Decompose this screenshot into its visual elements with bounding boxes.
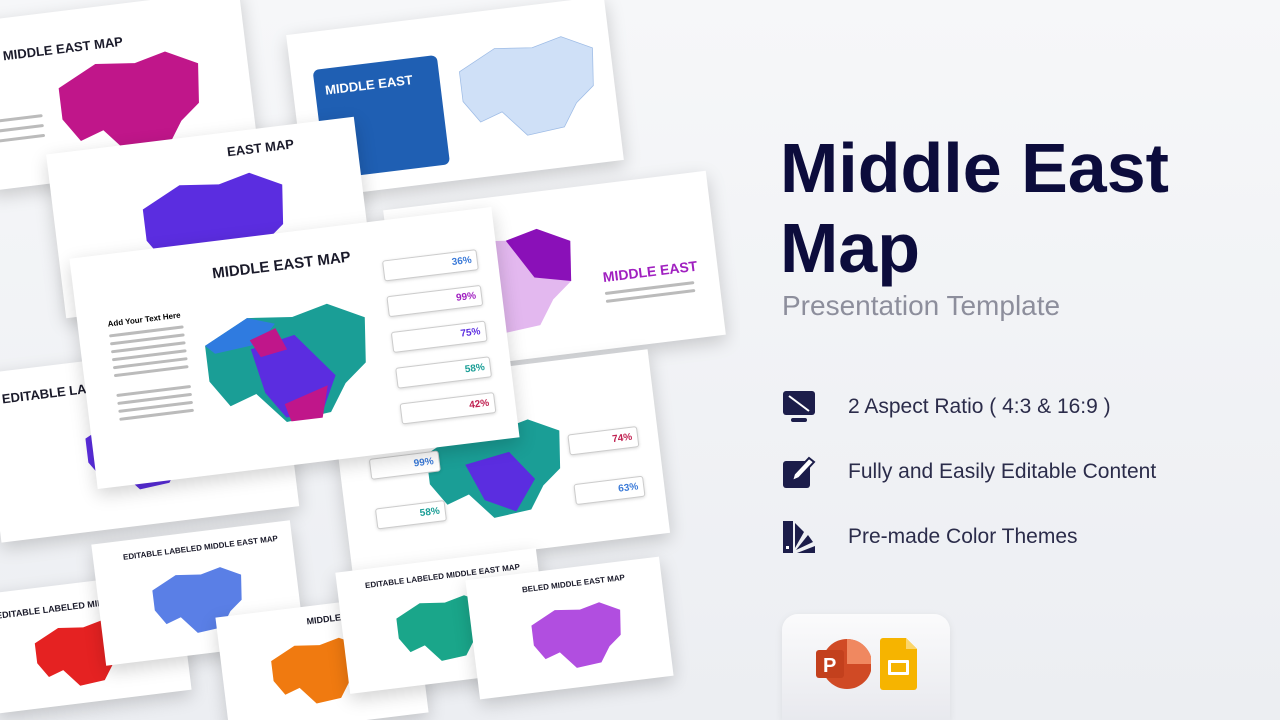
subtitle: Presentation Template	[782, 290, 1060, 321]
card: main middle east map: 58%	[464, 362, 485, 375]
card: teal map with percentages: 74%	[612, 432, 633, 445]
feature: aspect ratio: 2 Aspect Ratio ( 4:3 & 16:9 )	[848, 395, 1111, 418]
title	[780, 129, 1169, 287]
feature: color themes	[783, 521, 1078, 553]
card: pink MIDDLE EAST right: MIDDLE EAST	[602, 258, 698, 285]
collage: slide cards	[0, 0, 732, 720]
card: pink MIDDLE EAST right	[383, 171, 726, 374]
card: blue MIDDLE EAST	[286, 0, 624, 199]
card: orange bottom	[215, 593, 429, 720]
card: main middle east map: 36%	[451, 255, 472, 268]
card: main middle east map: 42%	[469, 398, 490, 411]
feature: aspect ratio	[783, 391, 1111, 422]
app icons box	[782, 614, 950, 720]
card: purple bottom: BELED MIDDLE EAST MAP	[521, 573, 625, 594]
card: purple labeled	[46, 117, 374, 318]
card: blue MIDDLE EAST: MIDDLE EAST	[324, 72, 414, 98]
card: teal map with percentages: 58%	[419, 506, 440, 519]
card: main middle east map	[69, 207, 520, 489]
card: main middle east map: Add Your Text Here	[107, 311, 181, 329]
card: purple bottom	[465, 557, 674, 699]
card: top-left magenta map	[0, 0, 259, 191]
card: top-left magenta map: MIDDLE EAST MAP	[2, 34, 124, 63]
card: editable labeled left	[0, 337, 299, 543]
main card title: MIDDLE EAST MAP	[211, 249, 352, 282]
card: red bottom	[0, 571, 192, 713]
title: Map	[780, 209, 920, 287]
icon: edit	[783, 456, 816, 488]
card: purple labeled: EAST MAP	[226, 136, 295, 159]
card: teal bottom: EDITABLE LABELED MIDDLE EAST MAP	[365, 562, 520, 590]
card: main middle east map: 99%	[455, 291, 477, 304]
icon: google slides	[880, 638, 917, 690]
card: teal map with percentages: 99%	[413, 456, 434, 469]
main map	[205, 304, 366, 422]
card: blue bottom: EDITABLE LABELED MIDDLE EAST MAP	[123, 534, 278, 562]
card: editable labeled left: EDITABLE LABELED	[1, 376, 131, 406]
card: main middle east map: 75%	[460, 326, 481, 340]
card: teal bottom	[335, 548, 551, 694]
icon: powerpoint	[816, 639, 871, 689]
feature: color themes: Pre-made Color Themes	[848, 525, 1078, 548]
icon: powerpoint: P	[823, 655, 836, 677]
card: blue bottom	[91, 520, 305, 666]
icon: monitor	[783, 391, 815, 422]
title: Middle East	[780, 129, 1169, 207]
card: teal map with percentages: 63%	[618, 481, 639, 495]
feature: editable	[783, 456, 1156, 488]
card: orange bottom: MIDDLE	[306, 612, 341, 627]
feature: editable: Fully and Easily Editable Content	[848, 460, 1156, 483]
icon: swatch	[783, 521, 815, 553]
card: teal map with percentages	[330, 349, 670, 572]
